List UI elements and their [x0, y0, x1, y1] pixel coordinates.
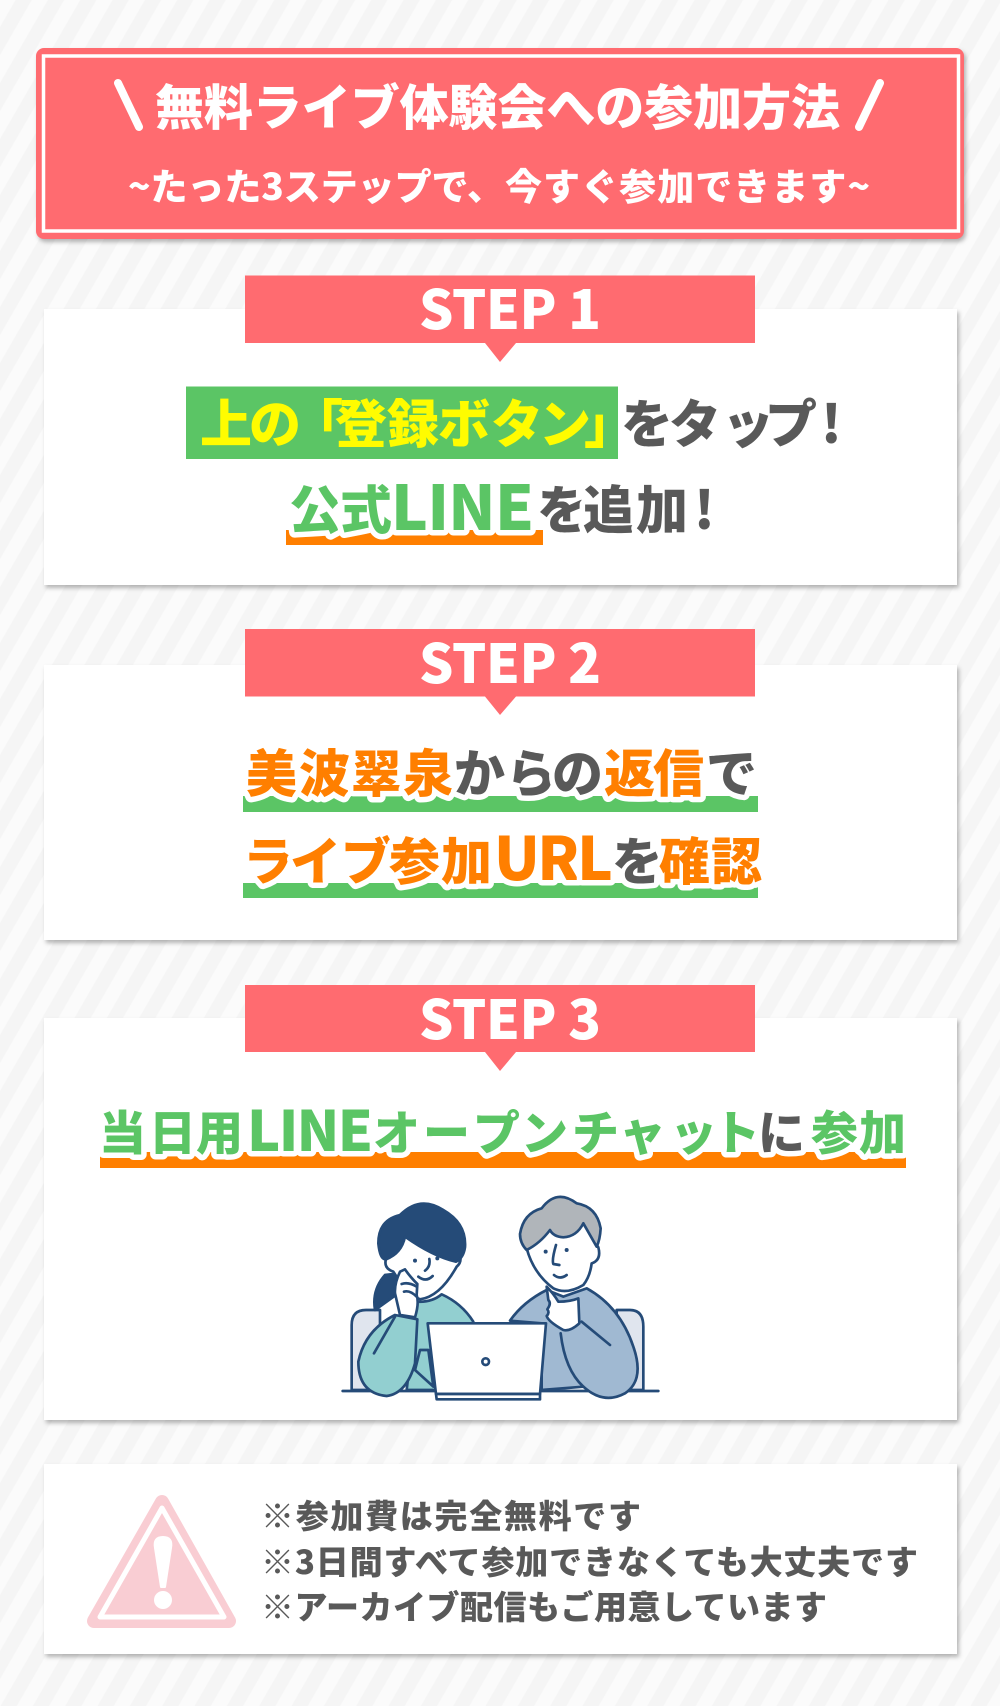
icon: warning triangle — [94, 1502, 229, 1621]
panel: step 3 — [44, 976, 957, 1420]
panel: notes — [44, 1464, 957, 1654]
laptop — [428, 1323, 546, 1399]
woman — [358, 1204, 473, 1396]
heading: main title: 無料ライブ体験会への参加方法 — [155, 69, 840, 140]
step 2 label tab: STEP 2 — [419, 620, 601, 699]
step 3 text — [99, 1087, 906, 1168]
step 1 line 2: を追加! — [537, 469, 715, 544]
illustration: two people looking at a laptop — [343, 1197, 658, 1399]
subtitle: ~たった3ステップで、 — [128, 157, 504, 211]
step 1 label tab — [245, 266, 755, 362]
step 1 line 2: LINE — [391, 458, 534, 548]
step 2 line 1: 美波翠泉 — [246, 733, 454, 807]
step 2 line 2: URL — [494, 811, 613, 898]
step 3 text: LINE — [247, 1087, 373, 1168]
step 2 line 1: からの — [454, 733, 603, 807]
panel: step 2 — [44, 620, 957, 940]
subtitle: 今すぐ参加できます~ — [505, 157, 870, 211]
subtitle — [128, 157, 870, 211]
step 2 line 2: 確認 — [659, 821, 762, 895]
step 3 label tab: STEP 3 — [419, 976, 601, 1055]
note lines: ※アーカイブ配信もご用意しています — [261, 1581, 827, 1629]
step 2 line 2: を — [612, 821, 663, 895]
panel: step 1 — [44, 266, 957, 585]
step 3 text: 参加 — [811, 1095, 906, 1164]
step 3 text: 当日用 — [99, 1095, 243, 1164]
step 1 line 1: をタップ! — [621, 383, 842, 458]
step 3 label tab — [245, 976, 755, 1071]
step 2 line 1: 返信 — [604, 733, 704, 807]
step 1 line 1 — [186, 383, 842, 459]
step 1 line 2: 公式 — [289, 469, 392, 544]
step 2 line 1 — [243, 733, 758, 812]
note lines: ※参加費は完全無料です — [261, 1490, 641, 1538]
step 1 line 1: 上の「登録ボタン」 — [200, 383, 636, 458]
panel: title banner — [36, 48, 964, 239]
man — [510, 1197, 638, 1398]
step 2 label tab — [245, 620, 755, 715]
step 1 label tab: STEP 1 — [419, 266, 601, 345]
step 3 text: オープンチャット — [373, 1095, 760, 1164]
step 2 line 1: で — [706, 733, 757, 807]
note lines: ※3日間すべて参加できなくても大丈夫です — [261, 1536, 918, 1584]
step 2 line 2 — [243, 811, 762, 898]
chairs and desk — [343, 1310, 658, 1391]
step 2 line 2: ライブ参加 — [243, 821, 492, 895]
note lines — [261, 1490, 918, 1629]
step 1 line 2 — [286, 458, 715, 548]
step 3 text: に — [758, 1095, 805, 1164]
